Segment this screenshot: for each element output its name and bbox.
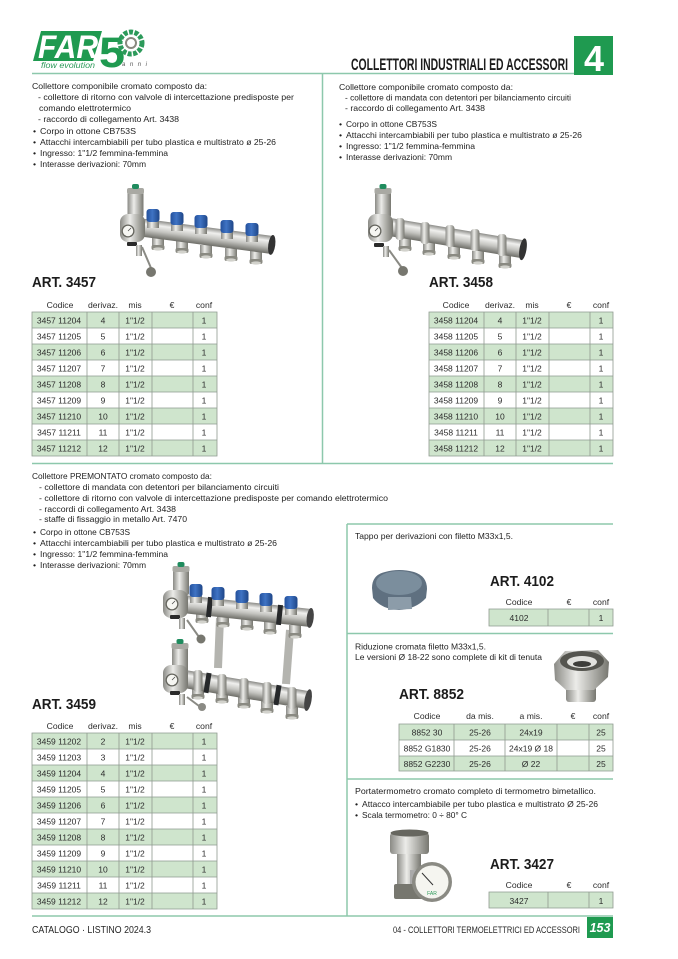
table: Art. 3458: 1"1/2 xyxy=(522,332,542,342)
table: Art. 3459: 1 xyxy=(202,800,207,810)
text block: Art. 3459 description: - collettore di ritorno con valvole di intercettazione predisposte per comando elettrotermico xyxy=(39,493,388,503)
text block: Art. 3459 description: • xyxy=(33,560,36,570)
table: Art. 3459: 3459 11210 xyxy=(37,864,81,874)
description xyxy=(355,786,598,820)
table: Art. 3459: 3459 11208 xyxy=(37,832,81,842)
table: Art. 3459: 12 xyxy=(98,896,108,906)
text block: Art. 3458 description: • xyxy=(339,119,342,129)
text block: Art. 3458 description: • xyxy=(339,141,342,151)
table: Art. 3458: 11 xyxy=(496,428,505,438)
table: Art. 3458: 1 xyxy=(599,396,604,406)
logo: FAR 50: flow evolution xyxy=(41,61,96,70)
table: Art. 3459: 3459 11202 xyxy=(37,736,81,746)
description: Portatermometro cromato completo di termometro bimetallico. xyxy=(355,786,596,796)
table: Art. 3459: 3459 11203 xyxy=(37,752,81,762)
table: Art. 3459: 11 xyxy=(99,880,108,890)
table: Art. 3457: 1 xyxy=(202,380,207,390)
table: Art. 3458: 3458 11206 xyxy=(434,348,478,358)
logo: FAR 50: a n n i xyxy=(122,62,148,68)
table: Art. 3458: 1 xyxy=(599,364,604,374)
table: 4102 xyxy=(510,613,529,623)
table: Art. 3458: 1"1/2 xyxy=(522,364,542,374)
icon: reducer fitting xyxy=(554,650,609,702)
logo: FAR 50 xyxy=(33,29,148,77)
table: Art. 3457: conf xyxy=(196,300,213,310)
product image: manifold 3458 xyxy=(368,184,528,276)
description: • xyxy=(355,810,358,820)
text block: Art. 3458 description: - collettore di mandata con detentori per bilanciamento circuiti xyxy=(345,92,571,102)
table: Art. 3457: mis xyxy=(128,300,142,310)
text block: Art. 3457 description: • xyxy=(33,148,36,158)
table: Art. 3457: 1"1/2 xyxy=(125,364,145,374)
table: conf xyxy=(593,880,610,890)
table: Art. 3458: 3458 11212 xyxy=(434,444,478,454)
table: Art. 3457: 1"1/2 xyxy=(125,380,145,390)
text block: Art. 3457 description: • xyxy=(33,126,36,136)
panel: Art. 3427 xyxy=(355,786,613,908)
table: Codice xyxy=(414,711,441,721)
table: Art. 3459: € xyxy=(170,721,175,731)
table: Art. 3457: 3457 11206 xyxy=(37,348,81,358)
logo: FAR 50: FAR xyxy=(38,29,98,65)
table: Art. 3458: 1 xyxy=(599,316,604,326)
heading: ART. 3427 xyxy=(490,856,554,873)
table: Art. 3457: 3457 11204 xyxy=(37,316,81,326)
table: Art. 3457: 3457 11207 xyxy=(37,364,81,374)
table: Art. 3459: Codice xyxy=(47,721,74,731)
description xyxy=(355,642,542,662)
text block: Art. 3459 description: Interasse derivazioni: 70mm xyxy=(40,560,146,570)
table: Art. 3458: 3458 11207 xyxy=(434,364,478,374)
table: 25-26 xyxy=(469,744,491,754)
description: Tappo per derivazioni con filetto M33x1,5. xyxy=(355,531,513,541)
table: Art. 3459: 1"1/2 xyxy=(125,752,145,762)
icon: thermometer holder: FAR xyxy=(427,891,437,897)
table: Art. 3459: 1 xyxy=(202,896,207,906)
table: Art. 3457: 1"1/2 xyxy=(125,428,145,438)
table: Art. 3459: conf xyxy=(196,721,213,731)
table: Art. 3457: € xyxy=(170,300,175,310)
text block: Art. 3457 description: - raccordo di collegamento Art. 3438 xyxy=(38,114,179,124)
text block: Art. 3459 description: Ingresso: 1"1/2 femmina-femmina xyxy=(40,549,168,559)
text block: Art. 3457 description: Collettore componibile cromato composto da: xyxy=(32,81,207,91)
table: Art. 3458: mis xyxy=(525,300,539,310)
table: Art. 3458: 3458 11205 xyxy=(434,332,478,342)
table xyxy=(489,880,613,908)
product image: manifold 3457 xyxy=(120,184,277,277)
table: Art. 3458: 1 xyxy=(599,348,604,358)
table: 24x19 Ø 18 xyxy=(509,744,553,754)
table: 25 xyxy=(596,759,606,769)
table: Art. 3458: 1"1/2 xyxy=(522,428,542,438)
text block: Art. 3457 description: • xyxy=(33,159,36,169)
panel: Art. 4102 xyxy=(355,531,613,626)
text block: Art. 3458 description: Corpo in ottone CB753S xyxy=(346,119,437,129)
text block: Art. 3459 description: • xyxy=(33,538,36,548)
table: Art. 3458: 6 xyxy=(498,348,503,358)
table: Art. 3457: 3457 11210 xyxy=(37,412,81,422)
table: Art. 3457: 9 xyxy=(101,396,106,406)
text block: Art. 3458 description: Ingresso: 1"1/2 femmina-femmina xyxy=(346,141,475,151)
table: Art. 3459: 1"1/2 xyxy=(125,896,145,906)
table: 25-26 xyxy=(469,759,491,769)
table: Art. 3459: 1"1/2 xyxy=(125,880,145,890)
text block: Art. 3457 description: Corpo in ottone CB753S xyxy=(40,126,136,136)
table: Art. 3459: 1 xyxy=(202,736,207,746)
table: Art. 3457: 10 xyxy=(98,412,108,422)
section heading xyxy=(351,36,613,79)
product image: premounted manifold pair 3459 xyxy=(163,562,315,720)
table: Art. 3459: 6 xyxy=(101,800,106,810)
table: Art. 3458: conf xyxy=(593,300,610,310)
table: Art. 3459: 1"1/2 xyxy=(125,864,145,874)
table: Art. 3459: 1 xyxy=(202,848,207,858)
table: 1 xyxy=(599,613,604,623)
text block: Art. 3459 description: • xyxy=(33,527,36,537)
table: Art. 3459: 3459 11212 xyxy=(37,896,81,906)
table: 3427 xyxy=(510,896,529,906)
heading: ART. 4102 xyxy=(490,573,554,590)
table: Art. 3458: 1 xyxy=(599,380,604,390)
text block: Art. 3458 description: Interasse derivazioni: 70mm xyxy=(346,152,452,162)
table: Art. 3458: 3458 11210 xyxy=(434,412,478,422)
table: Codice xyxy=(506,880,533,890)
table: Art. 3459: 1 xyxy=(202,784,207,794)
table: Art. 3459: 1 xyxy=(202,832,207,842)
table: Art. 3458: 3458 11211 xyxy=(434,428,478,438)
table: Art. 3458: derivaz. xyxy=(485,300,515,310)
table: Art. 3457: 1"1/2 xyxy=(125,444,145,454)
text block: Art. 3458 description: Attacchi intercambiabili per tubo plastica e multistrato ø 25-26 xyxy=(346,130,582,140)
text block: Art. 3458 description: Collettore componibile cromato composto da: xyxy=(339,82,513,92)
table: Art. 3459: mis xyxy=(128,721,142,731)
table: 8852 G1830 xyxy=(404,744,451,754)
text block: Art. 3457 description: Attacchi intercambiabili per tubo plastica e multistrato ø 25-26 xyxy=(40,137,276,147)
table: Art. 3457: 12 xyxy=(98,444,108,454)
table: Art. 3457: 1"1/2 xyxy=(125,348,145,358)
table: Art. 3457: 3457 11208 xyxy=(37,380,81,390)
table: Art. 3459: 1 xyxy=(202,816,207,826)
table: Art. 3459: derivaz. xyxy=(88,721,118,731)
description: Scala termometro: 0 ÷ 80° C xyxy=(362,810,467,820)
table: 8852 30 xyxy=(412,728,443,738)
section heading: 4 xyxy=(584,38,604,79)
table: da mis. xyxy=(466,711,494,721)
table: Art. 3457: 11 xyxy=(99,428,108,438)
table: Ø 22 xyxy=(522,759,540,769)
footer: catalogue label: CATALOGO · LISTINO 2024.3 xyxy=(32,925,151,936)
text block: Art. 3458 description: • xyxy=(339,152,342,162)
table: Art. 3457: 1"1/2 xyxy=(125,332,145,342)
table: Art. 3457: derivaz. xyxy=(88,300,118,310)
table: Art. 3458: 3458 11208 xyxy=(434,380,478,390)
table: Art. 3459: 3459 11206 xyxy=(37,800,81,810)
table: Art. 3459: 1"1/2 xyxy=(125,800,145,810)
table: Codice xyxy=(506,597,533,607)
table: Art. 3457: 1 xyxy=(202,444,207,454)
table: Art. 3459: 1"1/2 xyxy=(125,784,145,794)
footer: chapter label: 04 - COLLETTORI TERMOELETTRICI ED ACCESSORI xyxy=(393,925,580,936)
table: € xyxy=(567,597,572,607)
table xyxy=(399,711,613,771)
table: Art. 3458: 3458 11204 xyxy=(434,316,478,326)
text block: Art. 3459 description xyxy=(32,471,388,570)
table: Art. 3457: 1"1/2 xyxy=(125,412,145,422)
table: Art. 3459: 3459 11207 xyxy=(37,816,81,826)
table: 1 xyxy=(599,896,604,906)
page number: 153 xyxy=(590,921,610,935)
table: Art. 3458: 1"1/2 xyxy=(522,380,542,390)
logo: FAR 50: 5 xyxy=(99,29,125,77)
table: Art. 3457: 1 xyxy=(202,348,207,358)
table: Art. 3458: 4 xyxy=(498,316,503,326)
table: Art. 3458: 1"1/2 xyxy=(522,348,542,358)
table: Art. 3457: 1 xyxy=(202,428,207,438)
description: Le versioni Ø 18-22 sono complete di kit di tenuta xyxy=(355,652,542,662)
table: Art. 3457: 6 xyxy=(101,348,106,358)
table: Art. 3458: 1 xyxy=(599,412,604,422)
text block: Art. 3459 description: - collettore di mandata con detentori per bilanciamento circuiti xyxy=(39,482,279,492)
table: Art. 3459: 1 xyxy=(202,880,207,890)
table: Art. 3459: 4 xyxy=(101,768,106,778)
table: Art. 3458: 1 xyxy=(599,332,604,342)
icon: hex cap xyxy=(372,570,427,610)
text block: Art. 3458 description: • xyxy=(339,130,342,140)
table: 8852 G2230 xyxy=(404,759,451,769)
table: Art. 3458: 7 xyxy=(498,364,503,374)
table: Art. 3457: 3457 11212 xyxy=(37,444,81,454)
table: Art. 3459: 3459 11205 xyxy=(37,784,81,794)
table: Art. 3458: 1"1/2 xyxy=(522,316,542,326)
table: Art. 3458 xyxy=(429,300,613,456)
table: Art. 3458: 1 xyxy=(599,428,604,438)
text block: Art. 3459 description: - staffe di fissaggio in metallo Art. 7470 xyxy=(39,514,187,524)
table: Art. 3457: 1 xyxy=(202,412,207,422)
text block: Art. 3458 description xyxy=(339,82,582,162)
icon: thermometer holder xyxy=(390,830,452,902)
text block: Art. 3459 description: Corpo in ottone CB753S xyxy=(40,527,130,537)
table: Art. 3458: 1 xyxy=(599,444,604,454)
table: Art. 3458: 1"1/2 xyxy=(522,412,542,422)
description: • xyxy=(355,799,358,809)
table: Art. 3459: 3459 11211 xyxy=(37,880,81,890)
table: Art. 3459 xyxy=(32,721,217,909)
table: Art. 3457: 1 xyxy=(202,332,207,342)
table: Art. 3459: 7 xyxy=(101,816,106,826)
text block: Art. 3458 description: - raccordo di collegamento Art. 3438 xyxy=(345,103,485,113)
table: 25 xyxy=(596,728,606,738)
table: a mis. xyxy=(520,711,542,721)
table: 25-26 xyxy=(469,728,491,738)
table: Art. 3457: 1"1/2 xyxy=(125,316,145,326)
table: Art. 3459: 1"1/2 xyxy=(125,736,145,746)
heading: ART. 3457: ART. 3457 xyxy=(32,274,96,291)
table: Art. 3457: 1 xyxy=(202,364,207,374)
table: Art. 3459: 10 xyxy=(98,864,108,874)
table: Art. 3457: 8 xyxy=(101,380,106,390)
table: Art. 3459: 1"1/2 xyxy=(125,832,145,842)
table: Art. 3458: Codice xyxy=(443,300,470,310)
table: 24x19 xyxy=(519,728,543,738)
heading: ART. 3458: ART. 3458 xyxy=(429,274,493,291)
table: Art. 3458: 12 xyxy=(495,444,505,454)
table xyxy=(489,597,613,626)
table: Art. 3459: 8 xyxy=(101,832,106,842)
table: Art. 3457 xyxy=(32,300,217,456)
text block: Art. 3457 description: Interasse derivazioni: 70mm xyxy=(40,159,146,169)
table: Art. 3457: 1"1/2 xyxy=(125,396,145,406)
table: Art. 3459: 1"1/2 xyxy=(125,848,145,858)
table: 25 xyxy=(596,744,606,754)
table: Art. 3459: 1 xyxy=(202,864,207,874)
text block: Art. 3459 description: Attacchi intercambiabili per tubo plastica e multistrato ø 25-26 xyxy=(40,538,277,548)
table: Art. 3459: 3459 11204 xyxy=(37,768,81,778)
text block: Art. 3457 description: • xyxy=(33,137,36,147)
table: conf xyxy=(593,711,610,721)
text block: Art. 3459 description: - raccordi di collegamento Art. 3438 xyxy=(39,504,176,514)
text block: Art. 3459 description: Collettore PREMONTATO cromato composto da: xyxy=(32,471,212,481)
table: Art. 3458: € xyxy=(567,300,572,310)
table: Art. 3457: 7 xyxy=(101,364,106,374)
heading: ART. 3459: ART. 3459 xyxy=(32,696,96,713)
heading: ART. 8852 xyxy=(399,686,464,703)
description: Riduzione cromata filetto M33x1,5. xyxy=(355,642,486,652)
table: conf xyxy=(593,597,610,607)
table: Art. 3459: 3459 11209 xyxy=(37,848,81,858)
table: Art. 3459: 5 xyxy=(101,784,106,794)
text block: Art. 3457 description: comando elettrotermico xyxy=(39,103,131,113)
table: Art. 3459: 1 xyxy=(202,768,207,778)
table: Art. 3458: 8 xyxy=(498,380,503,390)
table: Art. 3457: Codice xyxy=(47,300,74,310)
table: Art. 3459: 9 xyxy=(101,848,106,858)
table: € xyxy=(571,711,576,721)
table: Art. 3457: 3457 11209 xyxy=(37,396,81,406)
table: Art. 3459: 2 xyxy=(101,736,106,746)
table: Art. 3459: 1"1/2 xyxy=(125,768,145,778)
text block: Art. 3457 description xyxy=(32,81,294,169)
table: Art. 3459: 1"1/2 xyxy=(125,816,145,826)
table: Art. 3459: 1 xyxy=(202,752,207,762)
table: Art. 3457: 4 xyxy=(101,316,106,326)
table: Art. 3458: 3458 11209 xyxy=(434,396,478,406)
table: Art. 3458: 1"1/2 xyxy=(522,396,542,406)
table: Art. 3458: 9 xyxy=(498,396,503,406)
table: Art. 3457: 3457 11211 xyxy=(37,428,81,438)
description: Attacco intercambiabile per tubo plastica e multistrato Ø 25-26 xyxy=(362,799,598,809)
panel: Art. 8852 xyxy=(355,642,613,771)
table: Art. 3458: 5 xyxy=(498,332,503,342)
table: Art. 3457: 3457 11205 xyxy=(37,332,81,342)
table: Art. 3457: 5 xyxy=(101,332,106,342)
table: Art. 3459: 3 xyxy=(101,752,106,762)
divider lines xyxy=(32,73,613,916)
text block: Art. 3459 description: • xyxy=(33,549,36,559)
table: Art. 3457: 1 xyxy=(202,316,207,326)
text block: Art. 3457 description: Ingresso: 1"1/2 femmina-femmina xyxy=(40,148,168,158)
text block: Art. 3457 description: - collettore di ritorno con valvole di intercettazione predisposte per xyxy=(38,92,294,102)
page number xyxy=(587,917,613,938)
table: Art. 3458: 1"1/2 xyxy=(522,444,542,454)
table: Art. 3457: 1 xyxy=(202,396,207,406)
table: Art. 3458: 10 xyxy=(495,412,505,422)
table: € xyxy=(567,880,572,890)
